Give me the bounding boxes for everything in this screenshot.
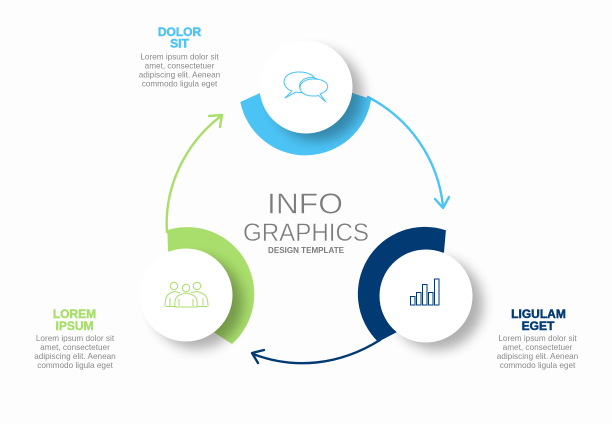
text block: Lorem Ipsum: Lorem ipsum dolor sit [36,334,115,343]
text block: Dolor Sit: adipiscing elit. Aenean [139,70,221,80]
text block: Ligulam Eget: Lorem ipsum dolor sit [498,334,577,343]
text block: Ligulam Eget: EGET [522,319,555,333]
text block: Lorem Ipsum: IPSUM [55,319,94,333]
shadow: left circle [151,257,243,349]
text block: Dolor Sit: Lorem ipsum dolor sit [140,52,219,62]
shadow: top circle [271,49,363,141]
text block: Ligulam Eget: commodo ligula eget [500,361,576,370]
text block: Dolor Sit: SIT [170,36,190,50]
ring: blue [240,93,371,155]
title: INFO [267,188,343,220]
text block: Lorem Ipsum [34,307,116,370]
text block: Ligulam Eget: LIGULAM [511,307,566,321]
text block: Lorem Ipsum: commodo ligula eget [37,361,113,370]
shadow: right circle [391,258,483,350]
text block: Dolor Sit [139,25,221,88]
ring: navy [358,227,446,342]
circle: top [260,40,352,134]
text block: Ligulam Eget: adipiscing elit. Aenean [497,352,579,361]
arrow: navy, right to left [252,340,380,363]
text block: Dolor Sit: amet, consectetuer [145,62,215,70]
text block: Lorem Ipsum: LOREM [53,307,96,321]
title: DESIGN TEMPLATE [268,245,344,255]
ring: green [167,227,254,344]
arrow: blue, top to right [368,97,449,208]
text block: Ligulam Eget: amet, consectetuer [503,343,573,352]
text block: Dolor Sit: DOLOR [158,25,201,39]
circle: left [140,248,232,342]
text block: Lorem Ipsum: amet, consectetuer [40,343,110,352]
icon: people [165,282,208,307]
title [243,188,369,255]
icon: bar chart [410,279,439,305]
title: GRAPHICS [243,219,369,247]
circle: right [380,250,472,342]
arrow: green, left to top [167,115,222,232]
text block: Dolor Sit: commodo ligula eget [142,80,218,88]
text block: Ligulam Eget [497,307,579,370]
icon: chat bubbles [284,72,328,102]
text block: Lorem Ipsum: adipiscing elit. Aenean [34,352,116,361]
